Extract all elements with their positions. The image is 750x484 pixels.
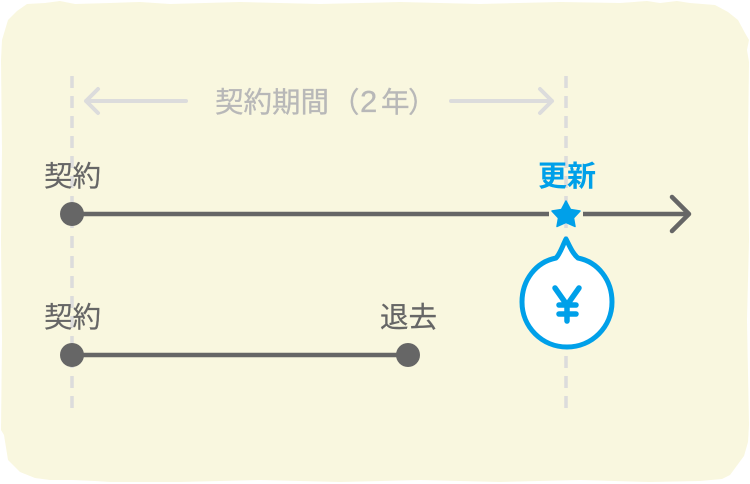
arrow: period left	[86, 89, 186, 113]
label: contract bottom: 契約	[44, 302, 101, 334]
dot: move out	[396, 343, 420, 367]
heading: contract period: 2	[360, 84, 377, 119]
dot: contract bottom	[60, 343, 84, 367]
icon: yen sign	[555, 288, 579, 321]
heading: contract period: ）	[408, 87, 437, 119]
arrow: period right	[451, 89, 552, 113]
timeline: renewal arrow	[72, 197, 689, 231]
heading: contract period: （	[331, 87, 360, 119]
label: move out: 退去	[380, 302, 437, 334]
heading: contract period: 年	[381, 87, 410, 119]
label: renewal: 更新	[538, 160, 596, 193]
heading: contract period: 契約期間	[215, 87, 329, 119]
label: contract top: 契約	[44, 161, 101, 193]
dashed guide: renewal	[564, 76, 568, 410]
icon: renewal star	[552, 201, 580, 226]
dashed guide: contract start	[70, 76, 74, 410]
callout: yen fee	[522, 239, 612, 347]
dot: contract top	[60, 202, 84, 226]
timeline: move out	[72, 353, 408, 357]
